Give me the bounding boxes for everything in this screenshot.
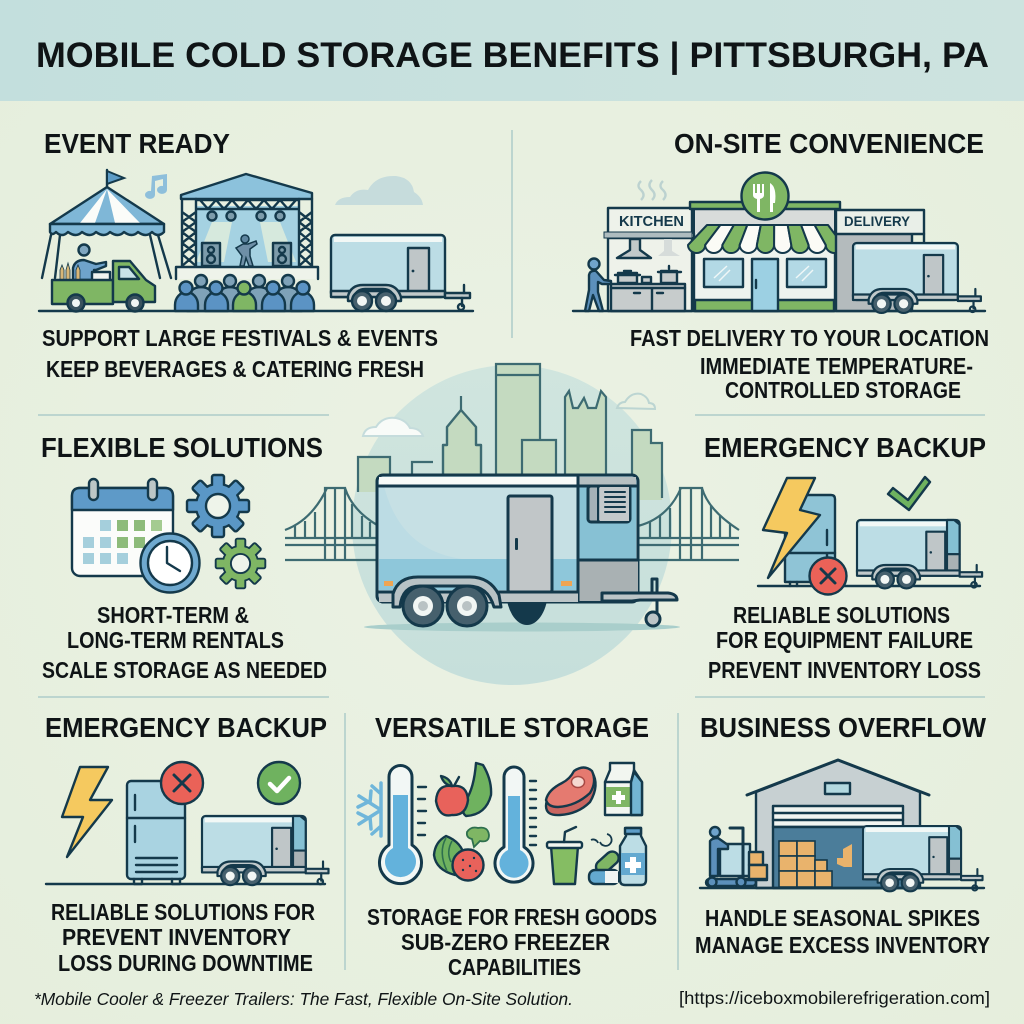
text: on-site: IMMEDIATE TEMPERATURE- xyxy=(700,353,973,379)
figure: cook xyxy=(585,258,611,311)
panel: versatile storage xyxy=(358,712,657,980)
panel: event ready xyxy=(39,128,473,382)
icon: delivery building: DELIVERY xyxy=(844,213,911,229)
icon: forklift with worker xyxy=(706,827,767,886)
text: emergency left: PREVENT INVENTORY xyxy=(62,924,291,950)
panel: on-site convenience xyxy=(573,128,989,403)
icon: trailer xyxy=(863,826,983,891)
text: event ready: SUPPORT LARGE FESTIVALS & EVENTS xyxy=(42,325,438,351)
icon: lightning bolt xyxy=(763,478,820,578)
text: emergency right: FOR EQUIPMENT FAILURE xyxy=(716,627,973,653)
icon: failed fridge xyxy=(785,495,835,586)
text: flexible: LONG-TERM RENTALS xyxy=(67,627,284,653)
text: versatile: STORAGE FOR FRESH GOODS xyxy=(367,904,657,930)
tongue and jack xyxy=(602,579,677,626)
footnote: *Mobile Cooler & Freezer Trailers: The Fast, Flexible On-Site Solution. xyxy=(34,989,573,1009)
icon: kitchen: KITCHEN xyxy=(619,213,684,230)
text: emergency left: LOSS DURING DOWNTIME xyxy=(58,950,313,976)
icon: blue gear xyxy=(187,475,249,537)
text: emergency right xyxy=(708,602,981,683)
awning xyxy=(688,225,843,253)
icon: apple and cucumber xyxy=(436,763,491,816)
icon: pills and medicine bottle xyxy=(589,828,646,885)
ground line xyxy=(700,887,984,889)
heading: EVENT READY xyxy=(44,128,230,159)
text: versatile: SUB-ZERO FREEZER xyxy=(401,929,610,955)
heading: EMERGENCY BACKUP xyxy=(704,432,986,463)
left bridge xyxy=(285,488,377,560)
refrigeration unit xyxy=(588,486,630,522)
ground shadow xyxy=(364,622,680,632)
icon: green drink xyxy=(547,827,582,884)
text: emergency right: PREVENT INVENTORY LOSS xyxy=(708,657,981,683)
icon: steak xyxy=(546,768,596,815)
heading: EMERGENCY BACKUP xyxy=(45,712,327,743)
ground line xyxy=(39,310,473,312)
heading: BUSINESS OVERFLOW xyxy=(700,712,987,743)
icon: trailer xyxy=(853,243,981,313)
ground line xyxy=(758,585,980,587)
icon: warehouse xyxy=(747,760,929,888)
icon: trailer xyxy=(202,816,328,885)
text: on-site xyxy=(630,325,989,403)
text: on-site: CONTROLLED STORAGE xyxy=(725,377,961,403)
icon: clock xyxy=(140,534,200,592)
backdrop circle xyxy=(352,365,672,685)
fender and wheels xyxy=(393,577,501,626)
icon: fridge xyxy=(127,781,185,884)
icon: kitchen xyxy=(585,208,692,311)
icon: snowflake xyxy=(358,783,381,836)
text: versatile xyxy=(367,904,657,980)
icon: red x badge xyxy=(810,558,846,594)
text: flexible: SHORT-TERM & xyxy=(97,602,249,628)
panel: business overflow xyxy=(695,712,990,958)
text: flexible xyxy=(42,602,327,683)
source url: [https://iceboxmobilerefrigeration.com] xyxy=(679,988,990,1008)
clouds xyxy=(363,394,655,436)
heading: FLEXIBLE SOLUTIONS xyxy=(41,432,323,463)
ground line xyxy=(573,310,985,312)
skyline xyxy=(358,364,662,500)
icon: thermometer right xyxy=(495,767,536,882)
icon: green check badge xyxy=(258,762,300,804)
icon: delivery building xyxy=(836,210,924,311)
icon: trailer xyxy=(331,235,470,311)
heading: VERSATILE STORAGE xyxy=(375,712,649,743)
icon: trailer xyxy=(857,520,982,588)
icon: red x badge xyxy=(161,762,203,804)
icon: calendar xyxy=(72,479,173,576)
boxes xyxy=(779,841,852,887)
icon: fork and knife sign xyxy=(742,172,788,220)
icon: music note xyxy=(145,174,167,199)
panel: emergency backup (right) xyxy=(704,432,986,683)
text: business xyxy=(695,905,990,958)
text: emergency right: RELIABLE SOLUTIONS xyxy=(733,602,950,628)
text: versatile: CAPABILITIES xyxy=(448,954,581,980)
right bridge xyxy=(638,488,739,560)
icon: thermometer left xyxy=(380,766,426,884)
icon: green check xyxy=(888,477,930,510)
header band xyxy=(0,0,1024,101)
panel: flexible solutions xyxy=(41,432,327,683)
title: MOBILE COLD STORAGE BENEFITS | PITTSBURGH, PA xyxy=(36,36,989,75)
central hero: trailer and Pittsburgh skyline xyxy=(285,364,739,685)
icon: cloud xyxy=(335,176,423,205)
panel: emergency backup (left) xyxy=(45,712,328,976)
large trailer xyxy=(377,475,677,626)
icon: watermelon and broccoli xyxy=(434,828,489,880)
ground line xyxy=(46,883,325,885)
text: emergency left: RELIABLE SOLUTIONS FOR xyxy=(51,899,315,925)
icon: green gear xyxy=(216,539,265,588)
icon: milk carton xyxy=(605,763,642,815)
text: event ready xyxy=(42,325,438,382)
text: flexible: SCALE STORAGE AS NEEDED xyxy=(42,657,327,683)
text: emergency left xyxy=(51,899,315,976)
text: event ready: KEEP BEVERAGES & CATERING FRESH xyxy=(46,356,424,382)
icon: tent and truck xyxy=(42,170,171,312)
heading: ON-SITE CONVENIENCE xyxy=(674,128,984,159)
icon: restaurant storefront xyxy=(688,172,843,311)
text: business: HANDLE SEASONAL SPIKES xyxy=(705,905,980,931)
icon: concert stage xyxy=(176,174,318,279)
icon: crowd xyxy=(175,275,314,311)
icon: steam xyxy=(638,180,666,200)
icon: lightning bolt xyxy=(62,767,112,857)
